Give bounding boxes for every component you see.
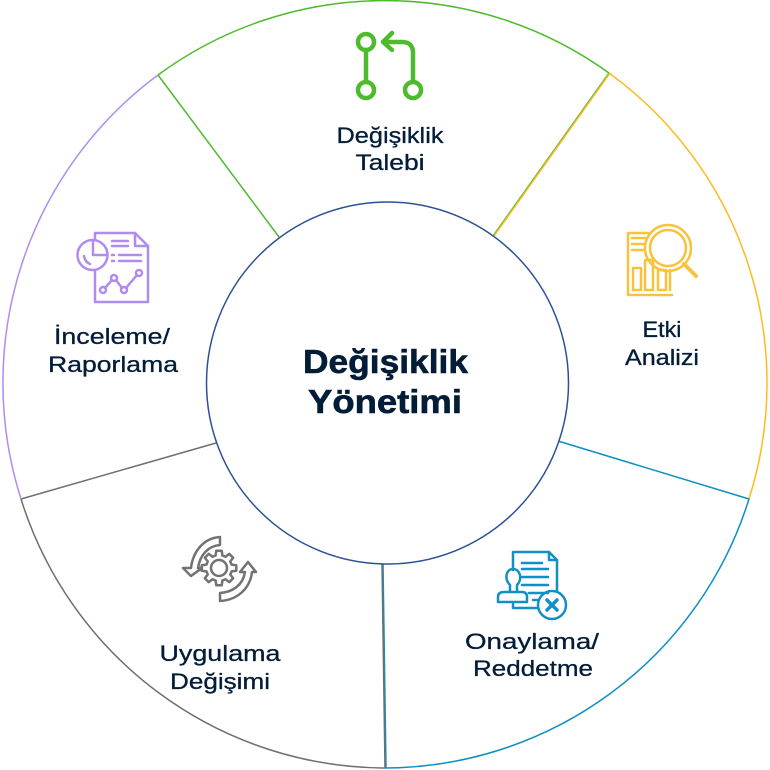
- label: Onaylama/Reddetme: Onaylama/: [465, 629, 600, 654]
- label: Uygulama Değişimi: Uygulama: [160, 641, 281, 666]
- icon: report document: [78, 233, 148, 302]
- icon: analysis magnifier: [628, 225, 696, 295]
- title: Değişiklik: [303, 343, 469, 380]
- icon: branch request: [358, 33, 421, 98]
- label: Uygulama Değişimi: Değişimi: [170, 669, 270, 694]
- segment: Uygulama Değişimi outline: [21, 443, 385, 768]
- label: Onaylama/Reddetme: Reddetme: [473, 656, 593, 681]
- segment: Değişiklik Talebi outline: [158, 1, 609, 237]
- icon: approval stamp: [498, 552, 566, 619]
- label: Değişiklik Talebi: Değişiklik: [336, 123, 445, 148]
- segment: Onaylama/Reddetme outline: [383, 441, 749, 768]
- label: Etki Analizi: Etki: [642, 317, 682, 342]
- icon: rotating gear: [183, 537, 256, 601]
- label: İnceleme/Raporlama: Raporlama: [48, 352, 179, 377]
- label: Değişiklik Talebi: Talebi: [356, 150, 424, 175]
- label: İnceleme/Raporlama: İnceleme/: [54, 324, 171, 349]
- label: Etki Analizi: Analizi: [625, 345, 699, 370]
- segment: Etki Analizi outline: [494, 73, 767, 499]
- segment: İnceleme/Raporlama outline: [3, 75, 158, 499]
- title: Yönetimi: [308, 383, 462, 420]
- center circle: [206, 202, 568, 564]
